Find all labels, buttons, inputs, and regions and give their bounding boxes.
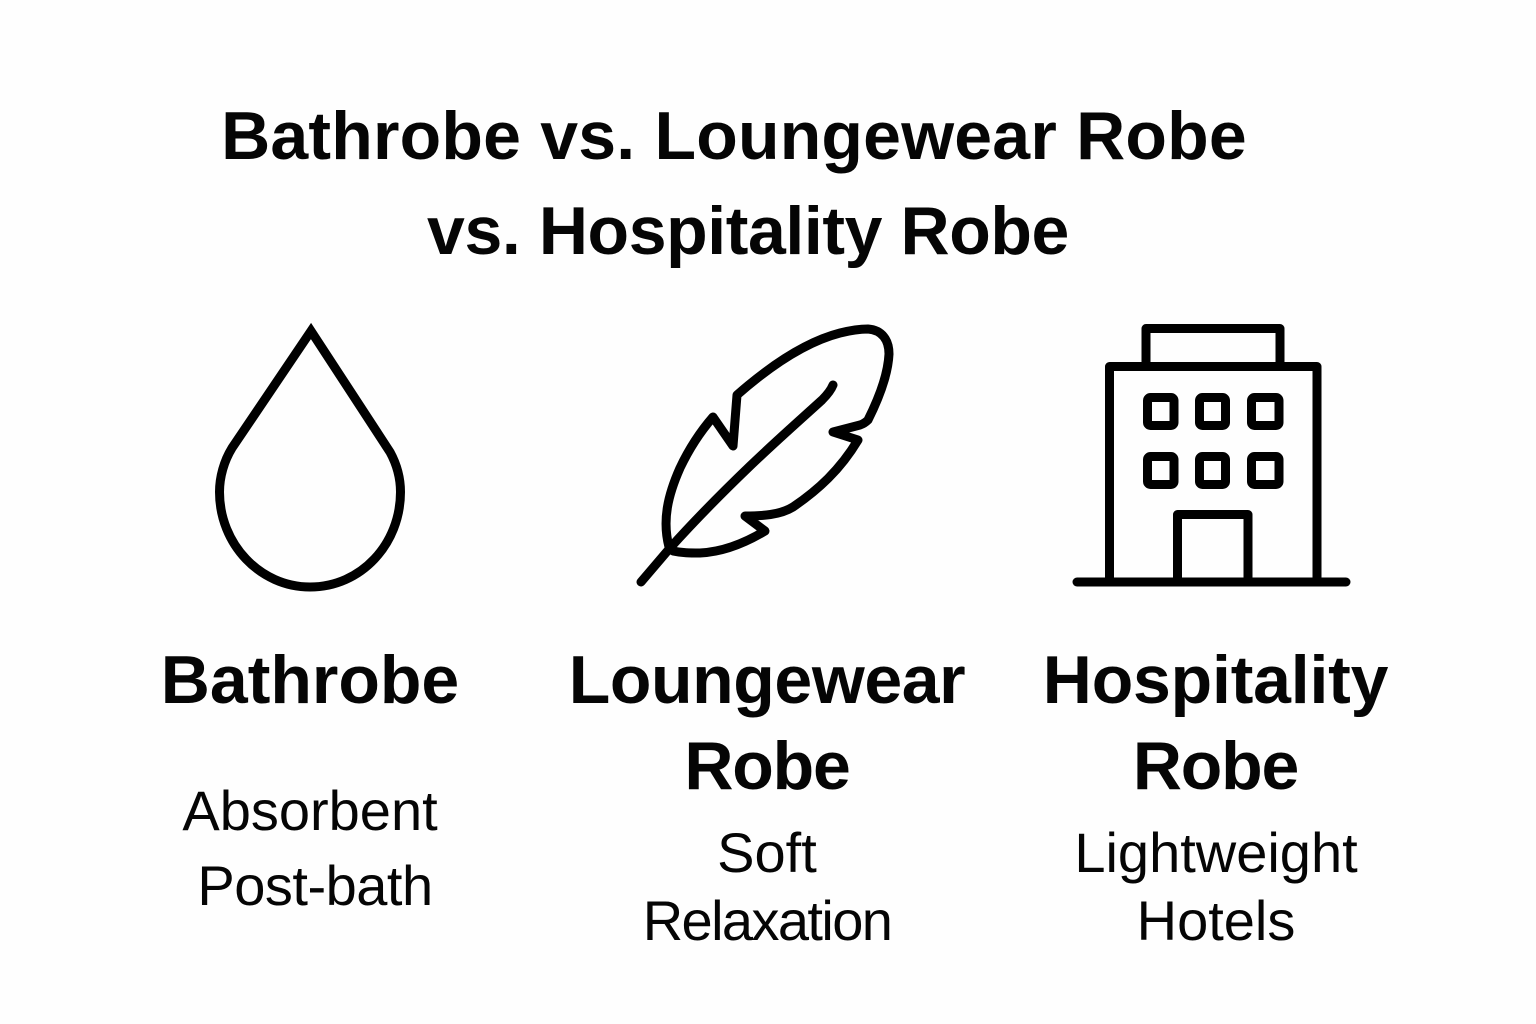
text: Loungewear traits: Relaxation xyxy=(643,889,891,952)
heading: Loungewear Robe: Loungewear xyxy=(569,642,965,718)
text: Bathrobe traits: Absorbent xyxy=(182,779,438,842)
text: Hospitality traits xyxy=(1074,821,1358,952)
text: Bathrobe traits xyxy=(182,779,438,917)
title: Bathrobe vs. Loungewear Robe xyxy=(221,98,1247,174)
text: Loungewear traits: Soft xyxy=(717,821,817,884)
heading: Hospitality Robe: Robe xyxy=(1133,728,1298,804)
title xyxy=(221,98,1247,269)
text: Hospitality traits: Lightweight xyxy=(1074,821,1358,884)
heading: Hospitality Robe xyxy=(1043,642,1388,804)
text: Loungewear traits xyxy=(643,821,891,952)
title: vs. Hospitality Robe xyxy=(427,193,1069,269)
text: Bathrobe traits: Post-bath xyxy=(197,854,433,917)
heading: Loungewear Robe: Robe xyxy=(684,728,850,804)
heading: Bathrobe: Bathrobe xyxy=(161,642,459,718)
text: Hospitality traits: Hotels xyxy=(1137,889,1295,952)
heading: Hospitality Robe: Hospitality xyxy=(1043,642,1388,718)
heading: Loungewear Robe xyxy=(569,642,965,804)
